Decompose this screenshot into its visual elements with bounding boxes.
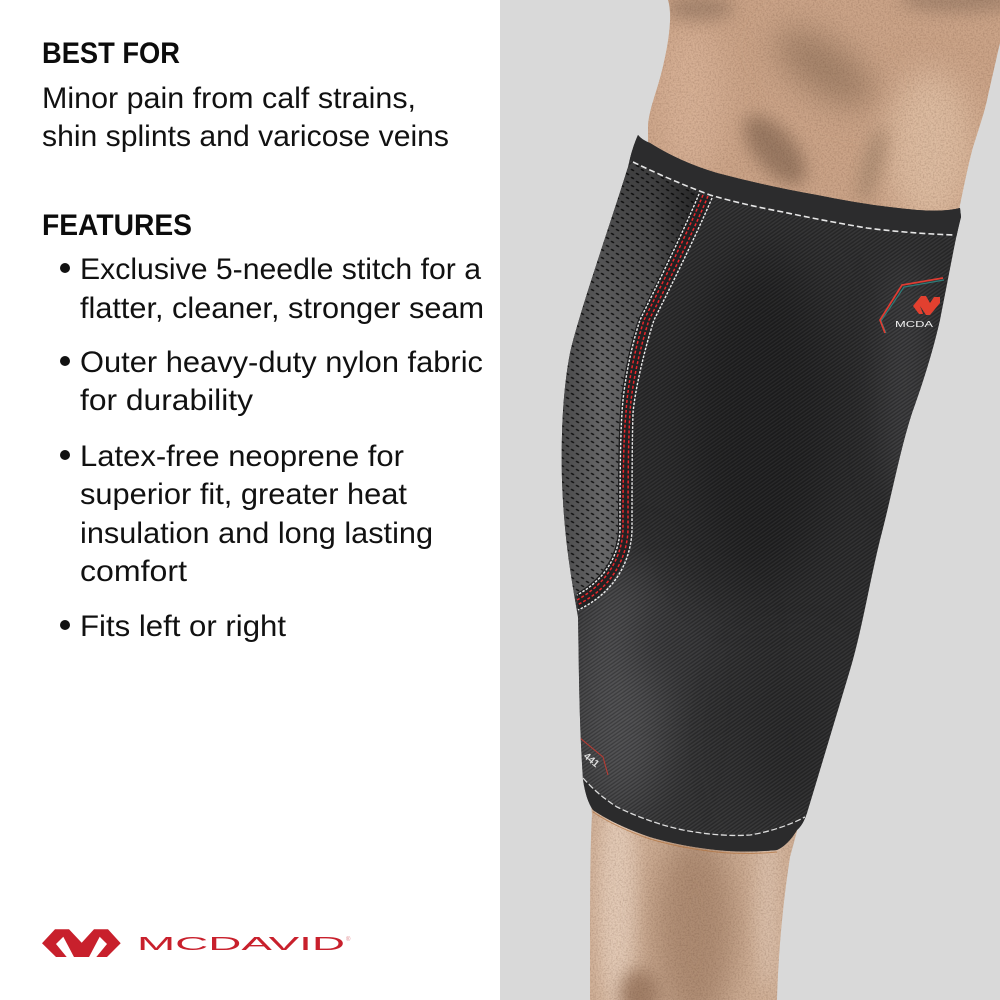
bottom cuff stitching: [583, 778, 805, 835]
feature: stitch: [60, 253, 484, 325]
heading: best for: BEST FOR: [42, 37, 180, 70]
sleeve size tag: 441: [581, 751, 601, 770]
sleeve body fabric: [555, 130, 965, 860]
mesh calf panel: [550, 162, 697, 600]
top cuff stitching: [633, 162, 953, 235]
wordmark: MCDAVID: [137, 934, 345, 954]
photo: upper calf skin: [648, 0, 1000, 210]
text block: best for description: shin splints and varicose veins: [42, 120, 449, 153]
photo: calf compression sleeve: [550, 130, 965, 860]
sleeve weave texture: [574, 138, 956, 835]
heading: features: FEATURES: [42, 209, 192, 242]
icon: McDavid emblem: [42, 929, 121, 958]
top cuff band: [622, 130, 965, 237]
background: white text panel: [0, 0, 500, 1000]
feature: neoprene: [60, 440, 433, 588]
sleeve fabric shading: [570, 250, 931, 820]
logo: McDavid: [42, 929, 351, 958]
feature: fit: Fits left or right: [80, 610, 287, 643]
sleeve size tag: [580, 738, 608, 775]
background: grey photo panel: [500, 0, 1000, 1000]
sleeve brand badge: [880, 278, 944, 333]
seam band: [577, 194, 712, 611]
photo: lower leg skin: [590, 808, 798, 1000]
bottom cuff band: [584, 780, 806, 852]
feature: neoprene: superior fit, greater heat: [80, 478, 408, 511]
feature: stitch: Exclusive 5-needle stitch for a: [80, 253, 481, 286]
feature: stitch: flatter, cleaner, stronger seam: [80, 292, 484, 325]
sleeve brand badge: MCDA: [895, 320, 934, 329]
feature: nylon fabric: [60, 346, 483, 417]
feature: neoprene: insulation and long lasting: [80, 517, 433, 550]
feature: nylon fabric: for durability: [80, 384, 253, 417]
text block: best for description: Minor pain from calf strains,: [42, 82, 416, 115]
seam stitching: [577, 194, 712, 610]
registered mark: ®: [346, 936, 351, 943]
feature: neoprene: Latex-free neoprene for: [80, 440, 404, 473]
text block: best for description: [42, 82, 449, 153]
feature list: [60, 253, 484, 643]
feature: nylon fabric: Outer heavy-duty nylon fabric: [80, 346, 483, 379]
feature: neoprene: comfort: [80, 555, 188, 588]
